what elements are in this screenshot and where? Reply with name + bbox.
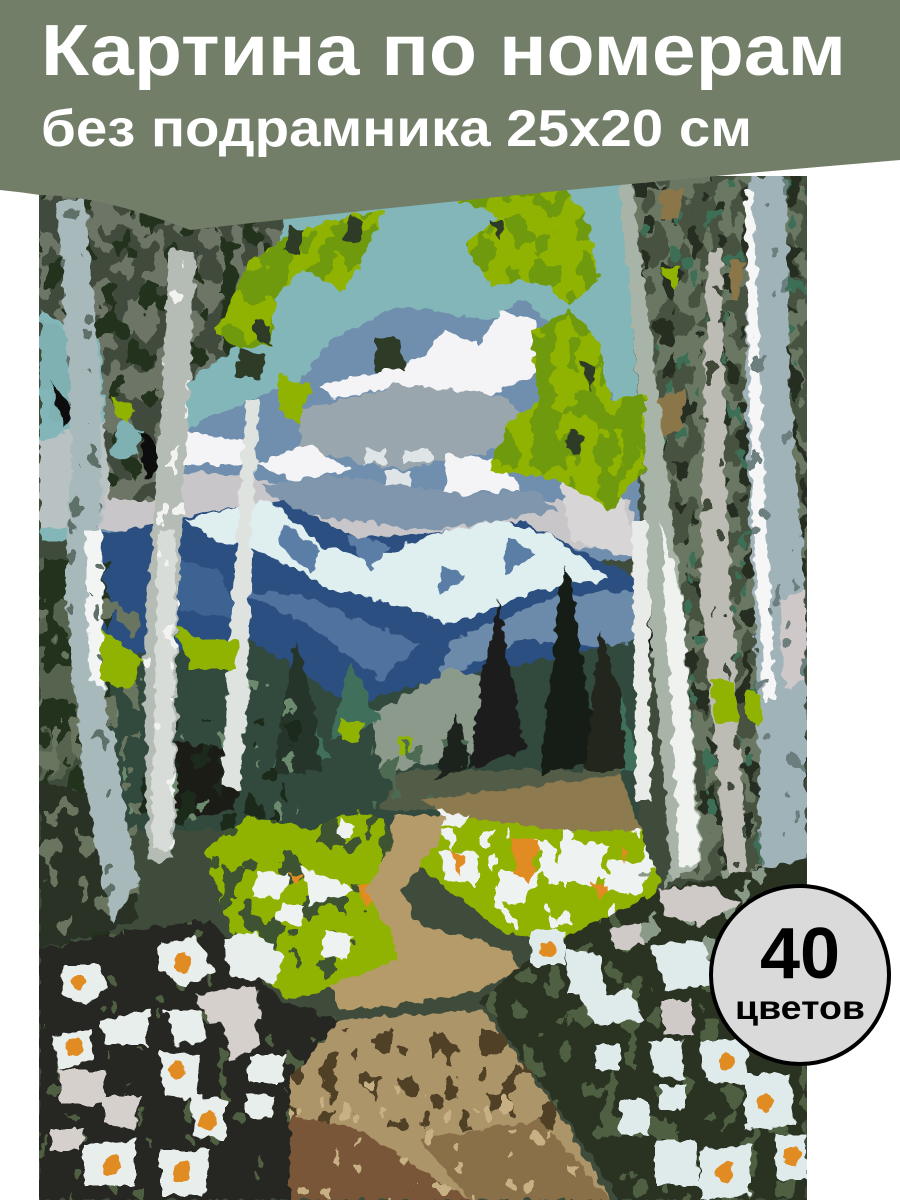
foliage: bright green leaves xyxy=(100,185,760,725)
path shadows xyxy=(280,1030,610,1200)
foreground leaves xyxy=(39,860,807,1200)
winding path xyxy=(330,815,520,1010)
sky xyxy=(40,176,640,540)
badge: 40 colours xyxy=(711,886,889,1064)
flower bushes xyxy=(205,810,660,1000)
badge: 40 colours: цветов xyxy=(735,989,865,1026)
flower centers: right group xyxy=(540,942,802,1181)
dirt ground xyxy=(420,775,640,830)
foliage: dark leaf spots xyxy=(235,215,595,455)
badge: 40 colours: 40 xyxy=(760,914,840,994)
flowers: right group xyxy=(530,885,807,1200)
clouds xyxy=(40,300,640,560)
mountains xyxy=(100,500,640,720)
birch trunks xyxy=(57,176,806,925)
flowers: left group xyxy=(50,932,285,1195)
subtitle: без подрамника 25х20 см xyxy=(41,100,752,158)
distant forest xyxy=(100,565,640,830)
flower centers: left group xyxy=(65,953,218,1182)
foreground right dark plants xyxy=(480,860,807,1200)
header banner xyxy=(0,0,900,230)
title: Картина по номерам xyxy=(41,11,846,91)
painting: mountain forest path xyxy=(39,176,807,1200)
forest patches left and right xyxy=(39,176,807,950)
foreground left dark plants xyxy=(39,920,340,1200)
